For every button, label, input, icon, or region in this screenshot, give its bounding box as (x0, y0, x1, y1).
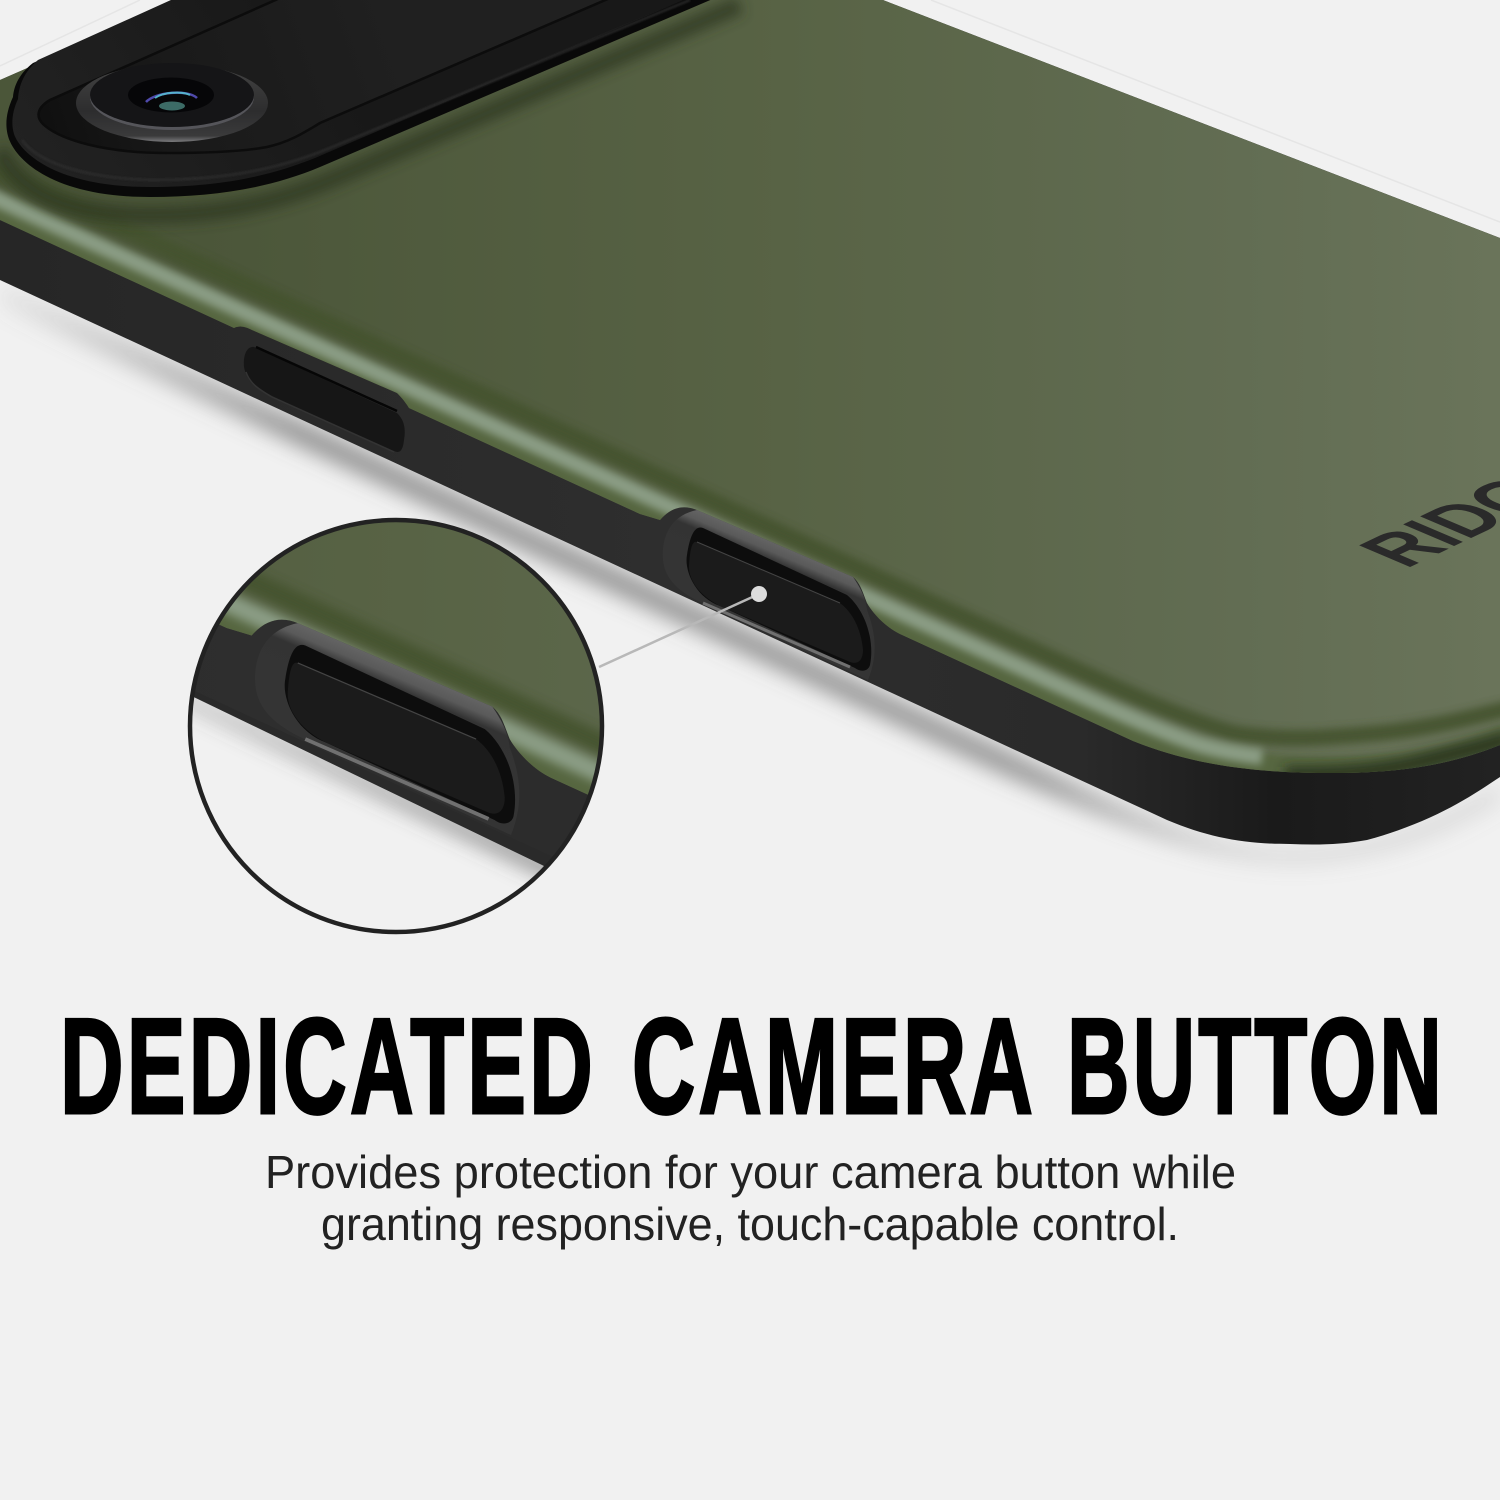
camera island shadow (0, 5, 740, 215)
lens cap (90, 64, 254, 130)
description: granting responsive, touch-capable control. (321, 1198, 1179, 1250)
cap hairline (697, 542, 840, 603)
lower highlight (703, 603, 850, 667)
magnified view (192, 522, 600, 882)
camera island (6, 0, 715, 197)
pointer dot (751, 586, 767, 602)
button cap (689, 542, 863, 663)
rim highlight (22, 0, 690, 180)
phone case (0, 0, 1500, 845)
black case body (0, 0, 1500, 845)
button recess (663, 510, 875, 680)
title: CAMERA (632, 990, 1036, 1142)
button groove (687, 527, 871, 671)
description: Provides protection for your camera button while (265, 1146, 1236, 1198)
lens ring (76, 64, 268, 142)
green back panel (0, 0, 1500, 800)
island recess (39, 0, 610, 153)
phone shadow (0, 282, 1500, 862)
magnifier ring (190, 520, 602, 932)
island rim (12, 0, 695, 187)
lens (76, 63, 268, 142)
camera button (663, 510, 875, 680)
pointer line (599, 594, 759, 667)
island outer edge (6, 0, 715, 197)
side button (244, 347, 405, 452)
description (265, 1146, 1236, 1250)
faint case outline (0, 0, 1500, 222)
magnifier callout (188, 518, 767, 934)
lens glass (128, 78, 214, 112)
title (60, 990, 1445, 1142)
title: DEDICATED (60, 990, 596, 1142)
